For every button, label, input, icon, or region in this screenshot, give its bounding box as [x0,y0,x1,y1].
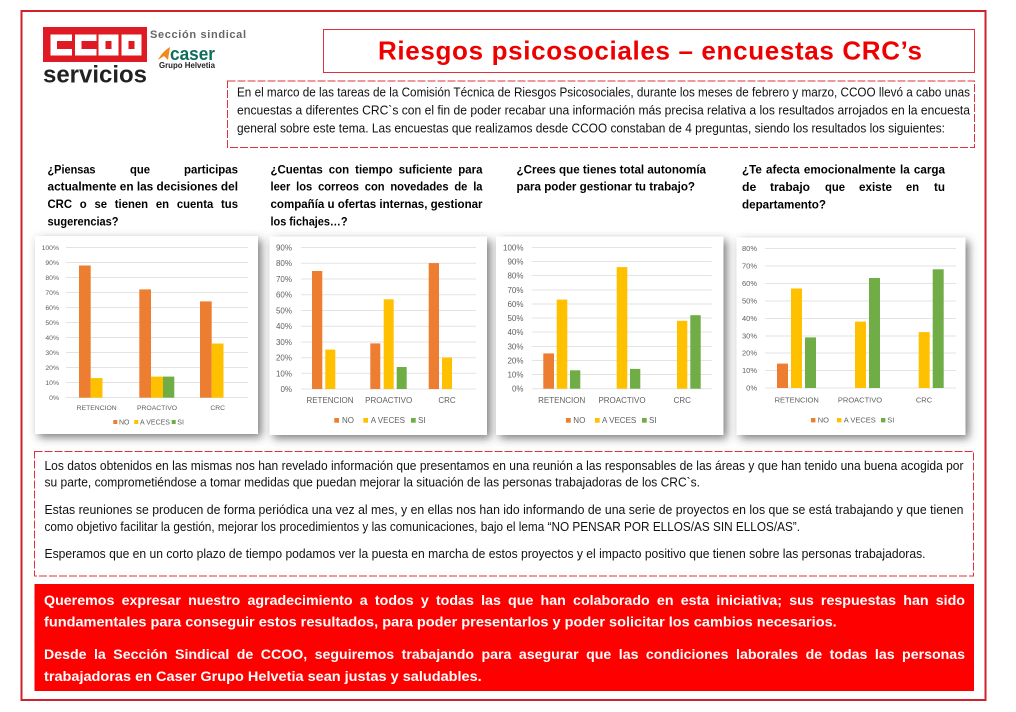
question 2: ¿Cuentas con tiempo suficiente para [270,162,483,176]
question 1: participas [184,162,238,176]
legend: SI [418,416,426,425]
results text block: su parte, comprometiéndose a tomar medidas que puedan mejorar la situación de las personas trabajadoras de los CRC`s. [44,476,700,490]
intro text block: general sobre este tema. Las encuestas que realizamos desde CCOO constaban de 4 preguntas, siendo los resultados los siguientes: [237,122,945,136]
results text block: Los datos obtenidos en las mismas nos han revelado información que presentamos en una reunión a las responsables de las áreas y que han tenido una buena acogida por [44,459,964,473]
legend: SI [887,416,894,425]
question 4: ¿Te afecta emocionalmente la carga [742,162,945,176]
intro text block: encuestas a diferentes CRC`s con el fin de poder recabar una información más precisa relativa a los resultados arrojados en la encuesta [237,104,970,118]
y axis labels: 0% [746,384,757,392]
red callout: Desde la Sección Sindical de CCOO, seguiremos trabajando para asegurar que las condiciones laborales de todas las personas [44,646,965,662]
question 3: para poder gestionar tu trabajo? [516,180,695,194]
y axis labels: 50% [276,306,292,316]
question 1: actualmente en las decisiones del [48,180,238,194]
y axis labels: 50% [45,320,59,327]
legend [566,416,657,425]
legend [334,416,426,425]
y axis labels: 40% [276,322,292,331]
question 2 [270,162,483,228]
y axis labels: 10% [45,380,59,387]
legend: A VECES [844,416,876,425]
results text block [34,452,974,576]
y axis labels [742,244,757,392]
y axis labels [503,244,524,394]
question 4: tu [934,180,945,194]
legend: A VECES [371,416,405,425]
y axis labels: 50% [742,296,757,306]
y axis labels: 80% [45,275,59,282]
chart 2: tiempo [270,236,487,435]
bars [79,266,224,398]
y axis labels: 60% [507,300,524,309]
intro text block [228,81,974,148]
intro text block: En el marco de las tareas de la Comisión Técnica de Riesgos Psicosociales, durante los meses de febrero y marzo, CCOO llevó a cabo unas [237,86,970,100]
y axis labels: 0% [49,395,59,402]
chart 1: decisiones [35,236,258,434]
y axis labels: 80% [507,272,524,280]
bars [543,267,701,389]
question 1: sugerencias? [48,214,118,228]
title [324,30,974,72]
category labels: RETENCION [306,396,354,405]
results text block: como objetivo facilitar la gestión, mejorar los procedimientos y las comunicaciones, bajo el lema “NO PENSAR POR ELLOS/AS SIN ELLOS/AS”. [44,520,800,534]
question 4: de [742,180,756,194]
y axis labels: 70% [45,290,59,297]
y axis labels: 40% [742,314,757,323]
question 1 [48,162,238,228]
y axis labels: 80% [276,259,292,268]
question 3: ¿Crees que tienes total autonomía [516,162,706,176]
red callout [34,584,974,691]
y axis labels: 20% [276,354,292,362]
legend: NO [818,416,829,425]
y axis labels: 30% [742,332,757,340]
question 2: los fichajes…? [270,214,348,228]
y axis labels [42,245,59,402]
y axis labels: 100% [503,244,524,252]
y axis labels: 30% [507,342,524,352]
y axis labels: 30% [276,338,292,347]
red callout: fundamentales para conseguir estos resultados, para poder presentarlos y poder solicitar los cambios necesarios. [44,614,837,630]
y axis labels: 20% [45,365,59,372]
category labels: CRC [916,396,933,404]
y axis labels: 60% [276,290,292,300]
question 4: existe [859,180,892,194]
bars [312,263,452,389]
question 4: que [825,180,845,194]
question 4: en [906,180,919,194]
chart 4: carga emocional [736,238,966,435]
y axis labels: 60% [45,305,59,312]
logo: CCOO servicios: servicios [43,62,147,88]
question 2: leer los correos con novedades de la [270,180,483,194]
results text block: Esperamos que en un corto plazo de tiempo podamos ver la puesta en marcha de estos proyectos y el impacto positivo que tienen sobre las personas trabajadoras. [44,547,926,561]
results text block: Estas reuniones se producen de forma periódica una vez al mes, y en ellas nos han ido informando de una serie de proyectos en los que se está trabajando y que tienen [44,503,964,517]
category labels: RETENCION [77,405,117,412]
y axis labels: 70% [507,286,524,295]
red callout: Queremos expresar nuestro agradecimiento a todos y todas las que han colaborado en esta iniciativa; sus respuestas han sido [44,592,965,608]
y axis labels: 10% [276,370,292,378]
category labels: PROACTIVO [838,396,882,404]
y axis labels: 90% [507,258,524,266]
y axis labels: 90% [45,260,59,267]
question 1: CRC o se tienen en cuenta tus [48,197,238,211]
chart 3: autonomia [496,236,724,435]
legend: A VECES [602,416,636,425]
category labels: PROACTIVO [137,405,177,412]
legend: NO [342,416,354,425]
y axis labels: 0% [280,385,292,394]
logo: Sección sindical Caser [150,29,246,70]
logo: Sección sindical Caser: Sección sindical [150,29,246,41]
y axis labels: 100% [42,245,59,252]
y axis labels: 70% [742,262,757,270]
y axis labels: 0% [512,384,524,394]
logo: Sección sindical Caser: caser [170,44,215,64]
title: Riesgos psicosociales – encuestas CRC’s [378,36,922,66]
question 1: ¿Piensas [48,162,96,176]
question 2: compañía u ofertas internas, gestionar [270,197,483,211]
legend [811,416,894,425]
category labels [538,396,691,405]
y axis labels: 20% [507,356,524,366]
category labels: RETENCION [538,396,585,405]
legend: SI [649,416,657,425]
category labels [306,396,456,405]
logo: Sección sindical Caser: Grupo Helvetia [159,61,216,70]
question 3 [516,162,706,194]
y axis labels: 40% [507,328,524,337]
legend: SI [177,420,184,426]
y axis labels: 10% [507,370,524,380]
y axis labels: 20% [742,348,757,358]
y axis labels: 40% [45,335,59,342]
category labels [775,396,933,404]
legend: NO [119,420,130,426]
category labels: PROACTIVO [598,396,646,405]
legend: NO [573,416,585,425]
legend: A VECES [140,420,170,426]
question 4 [742,162,945,212]
y axis labels: 90% [276,244,292,252]
question 4: trabajo [770,180,810,194]
y axis labels: 70% [276,275,292,284]
question 4: departamento? [742,198,826,212]
category labels [77,405,225,412]
category labels: CRC [210,405,225,412]
category labels: CRC [674,396,691,405]
y axis labels: 50% [507,314,524,323]
y axis labels: 30% [45,350,59,357]
legend [113,420,184,426]
red callout: trabajadoras en Caser Grupo Helvetia sean justas y saludables. [44,668,482,684]
bars [777,269,944,388]
category labels: RETENCION [775,396,819,404]
y axis labels: 80% [742,244,757,253]
y axis labels: 60% [742,279,757,288]
logo: CCOO servicios [43,27,147,88]
category labels: CRC [438,396,456,405]
y axis labels [276,244,292,394]
category labels: PROACTIVO [365,396,412,405]
y axis labels: 10% [742,366,757,375]
question 1: que [130,162,150,176]
